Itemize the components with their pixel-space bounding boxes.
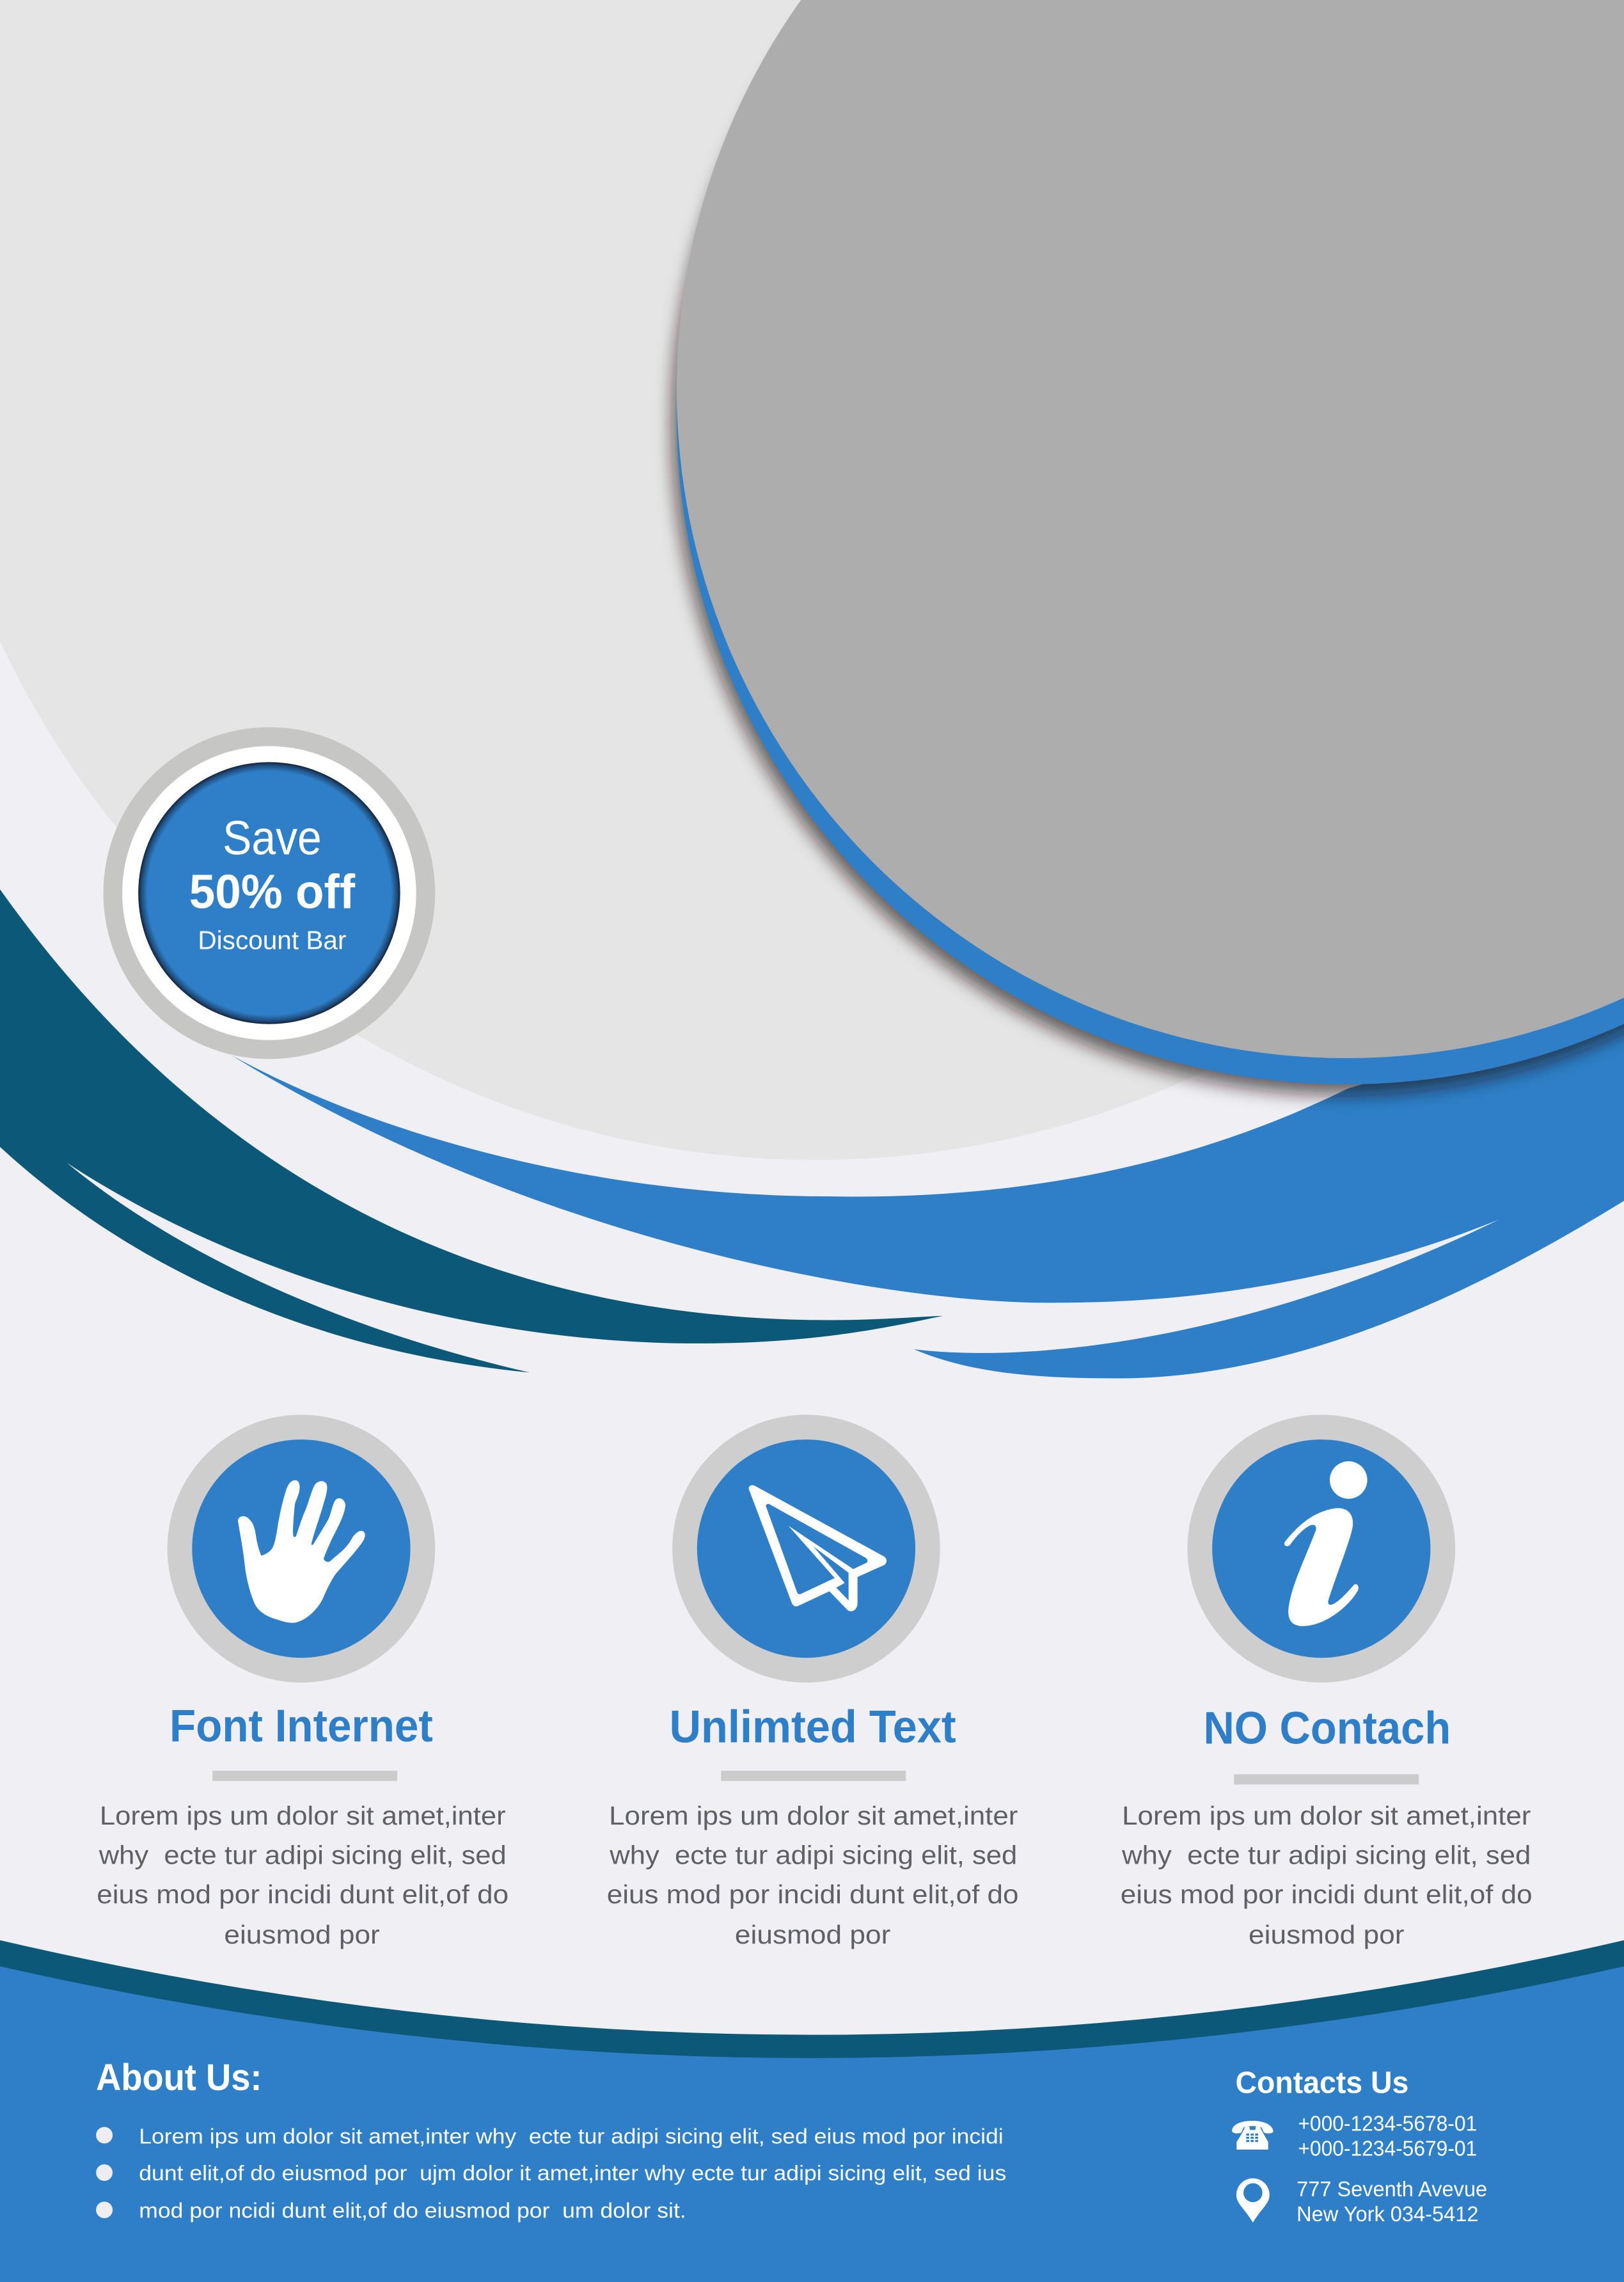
icon: info xyxy=(1187,1414,1455,1683)
contacts heading: Contacts Us xyxy=(1236,2066,1408,2100)
bullet list: dunt elit,of do eiusmod por ujm dolor it amet,inter why ecte tur adipi sicing elit, sed ius xyxy=(139,2162,1006,2185)
body text: Lorem ips um dolor sit amet,inter xyxy=(1122,1801,1531,1830)
phone numbers: +000-1234-5678-01 xyxy=(1298,2112,1477,2136)
icon: hand xyxy=(168,1414,435,1683)
body text: why ecte tur adipi sicing elit, sed xyxy=(609,1840,1017,1869)
grey photo placeholder circle xyxy=(677,0,1624,1058)
body text: eiusmod por xyxy=(1249,1920,1405,1949)
body text: eius mod por incidi dunt elit,of do xyxy=(607,1880,1019,1909)
phone numbers: +000-1234-5679-01 xyxy=(1298,2137,1477,2160)
heading: NO Contach xyxy=(1204,1703,1451,1754)
icon: map pin xyxy=(1236,2178,1270,2223)
blue swoosh xyxy=(232,1004,1624,1379)
contacts xyxy=(1232,2066,1487,2226)
body text xyxy=(607,1801,1019,1949)
footer blue panel xyxy=(0,1967,1624,2282)
badge text: discount bar: Discount Bar xyxy=(198,925,346,955)
body text: eiusmod por xyxy=(224,1920,380,1949)
feature: no contact xyxy=(1121,1414,1533,1949)
light grey background circle xyxy=(0,0,1624,1160)
icon: telephone xyxy=(1232,2121,1273,2150)
body text xyxy=(1121,1801,1533,1949)
heading: Font Internet xyxy=(169,1700,433,1752)
about us xyxy=(96,2057,1006,2223)
heading: Unlimted Text xyxy=(670,1701,956,1752)
address: New York 034-5412 xyxy=(1297,2203,1479,2226)
bullet list xyxy=(96,2125,1006,2223)
icon: paper plane xyxy=(672,1414,940,1683)
feature: font internet xyxy=(97,1414,508,1949)
footer dark curve xyxy=(0,1940,1624,2096)
badge text: 50% off: 50% off xyxy=(189,865,356,919)
address xyxy=(1297,2178,1487,2226)
body text: Lorem ips um dolor sit amet,inter xyxy=(609,1801,1018,1830)
address: 777 Seventh Avevue xyxy=(1297,2178,1487,2201)
discount badge xyxy=(104,727,435,1059)
bullet list: Lorem ips um dolor sit amet,inter why ecte tur adipi sicing elit, sed eius mod por incidi xyxy=(139,2125,1004,2149)
body text: eius mod por incidi dunt elit,of do xyxy=(97,1880,508,1909)
body text: eius mod por incidi dunt elit,of do xyxy=(1121,1880,1533,1909)
badge text: save: Save xyxy=(223,811,322,864)
body text xyxy=(97,1801,508,1949)
feature: unlimited text xyxy=(607,1414,1019,1949)
body text: eiusmod por xyxy=(735,1920,891,1949)
body text: why ecte tur adipi sicing elit, sed xyxy=(1121,1840,1531,1869)
dark teal swoosh xyxy=(0,889,943,1372)
phone numbers xyxy=(1298,2112,1477,2160)
bullet list: mod por ncidi dunt elit,of do eiusmod por um dolor sit. xyxy=(139,2199,686,2223)
body text: Lorem ips um dolor sit amet,inter xyxy=(100,1801,506,1830)
body text: why ecte tur adipi sicing elit, sed xyxy=(99,1840,507,1869)
shadow under photo circle xyxy=(672,0,1624,1095)
blue crescent under photo circle xyxy=(677,0,1624,1084)
about heading: About Us: xyxy=(96,2057,262,2098)
